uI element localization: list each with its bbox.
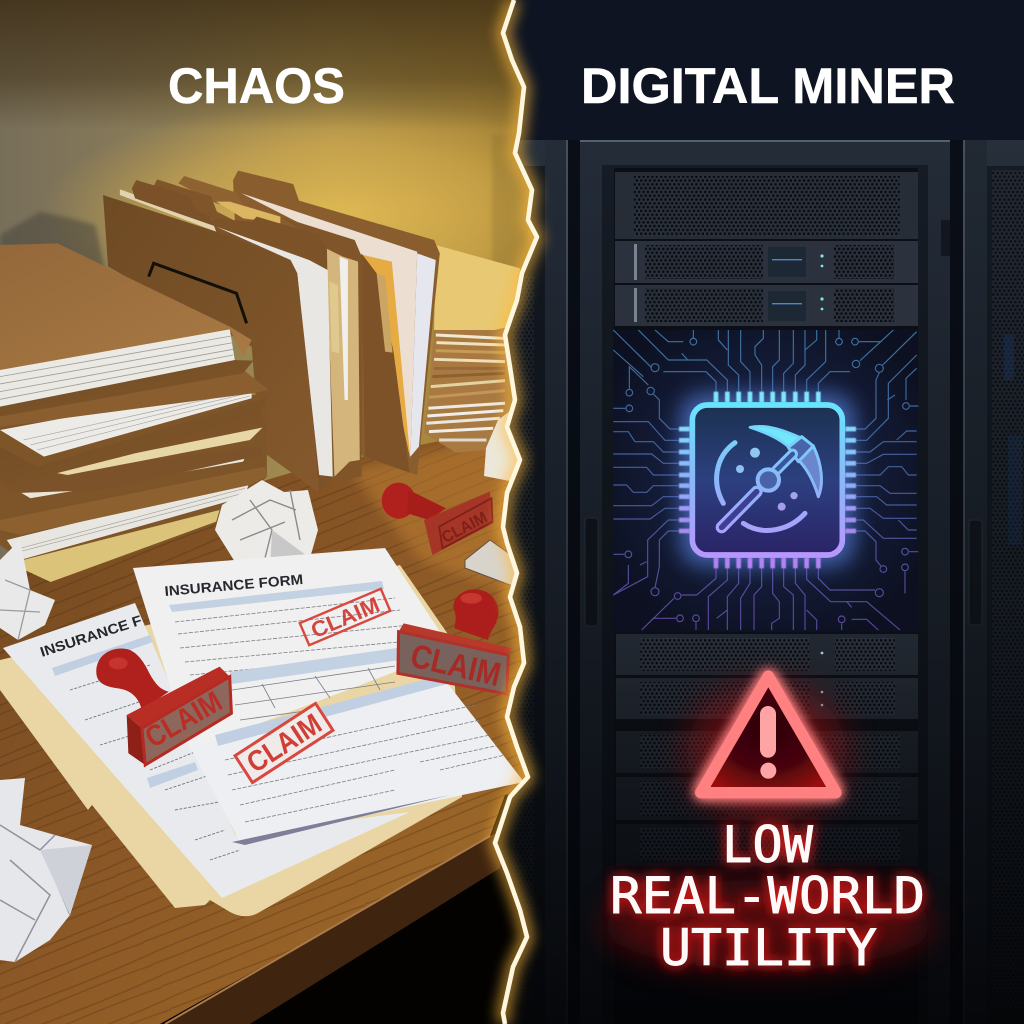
server unit 1 <box>615 241 918 283</box>
label line: real-world: REAL-WORLD <box>610 867 925 925</box>
wooden desk <box>0 420 540 1024</box>
crumpled paper: left <box>0 540 55 640</box>
dark background <box>568 140 963 804</box>
side rack left <box>512 140 568 1010</box>
lower server units <box>616 634 918 866</box>
crumpled paper: centre <box>215 480 318 572</box>
icon: warning triangle <box>701 676 836 793</box>
form: front insurance sheet <box>190 675 524 845</box>
middle folder <box>280 217 363 482</box>
upright folders and back paper stack <box>103 171 520 493</box>
low real-world utility label <box>603 816 933 977</box>
stamp text: CLAIM <box>439 508 490 547</box>
stamp: front left <box>96 649 231 765</box>
chip glow <box>680 393 855 567</box>
claim stamp mark: CLAIM <box>241 708 328 780</box>
label halo <box>603 880 933 970</box>
wall <box>0 0 640 620</box>
back tabs <box>178 176 280 218</box>
rack post fade <box>498 245 1024 1024</box>
circuit traces <box>613 330 918 630</box>
claim stamp mark: CLAIM <box>307 592 383 643</box>
jagged glowing divider <box>495 0 537 1024</box>
stamp text: CLAIM <box>407 638 504 694</box>
label glow: REAL-WORLD <box>610 867 925 925</box>
red glow <box>687 683 847 823</box>
chaos title: CHAOS <box>168 58 345 114</box>
side rack right <box>963 140 1024 1024</box>
rack bottom fade <box>614 634 918 1024</box>
rear folder <box>233 171 440 475</box>
label line: utility: UTILITY <box>660 919 877 977</box>
form title: INSURANCE FORM <box>164 571 304 599</box>
icon: pickaxe and coin <box>717 426 821 530</box>
stamp text: CLAIM <box>140 685 228 754</box>
left stack of folders <box>0 243 269 582</box>
white paper pile by divider <box>484 400 525 484</box>
server unit 2 <box>615 285 918 326</box>
top vent unit <box>615 172 918 239</box>
label glow: UTILITY <box>660 919 877 977</box>
chip circuit panel <box>613 330 918 632</box>
front tab folder <box>211 217 330 493</box>
form: top insurance sheet <box>133 548 452 750</box>
front folder panel <box>103 195 319 493</box>
chip body <box>692 405 842 555</box>
digital miner title: DIGITAL MINER <box>581 58 955 114</box>
form: left insurance sheet: INSURANCE F <box>38 612 144 660</box>
left panel: chaos desk scene <box>0 0 640 1024</box>
form: left insurance sheet <box>3 603 410 898</box>
stamp: right <box>398 589 512 694</box>
main rack frame <box>580 140 950 897</box>
silver notebook <box>465 540 525 588</box>
manila folder under forms <box>0 565 462 916</box>
label line: low: LOW <box>722 816 814 874</box>
label glow <box>610 816 925 977</box>
crumpled paper: bottom left <box>0 778 92 962</box>
stamp: back <box>382 483 493 555</box>
chip pins <box>679 392 856 568</box>
label glow: LOW <box>722 816 814 874</box>
right panel: digital miner server rack <box>480 0 1024 1024</box>
warning sign <box>687 676 847 823</box>
